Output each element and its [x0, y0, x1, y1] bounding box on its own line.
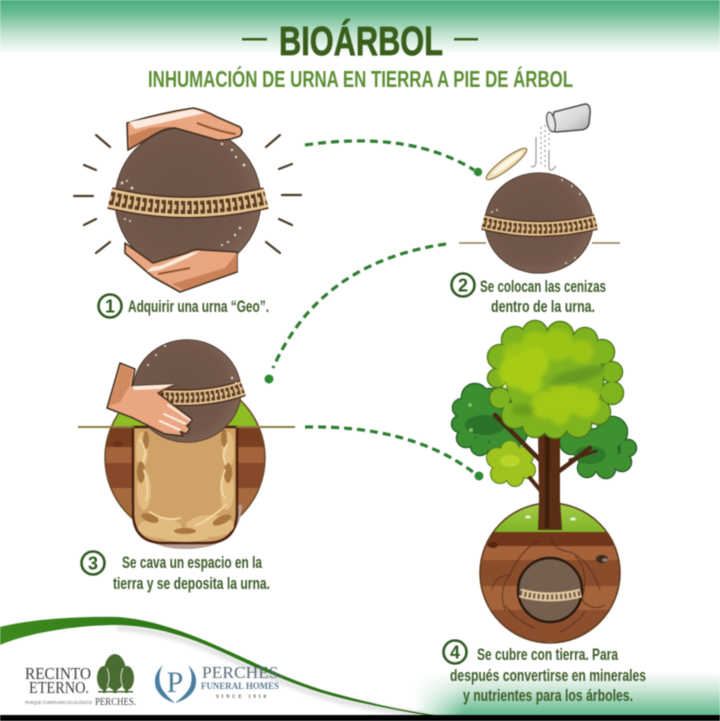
step 1 number badge: 1 — [105, 296, 115, 316]
icon: P emblem: P — [167, 666, 183, 699]
logo: Perches Funeral Homes: FUNERAL HOMES — [201, 681, 279, 691]
step 3 number badge — [82, 552, 104, 574]
step 3 caption: tierra y se deposita la urna. — [113, 574, 270, 593]
title: BIOÁRBOL — [279, 18, 443, 64]
icon: top hand — [127, 108, 242, 150]
logo: Perches Funeral Homes: PERCHES. — [202, 663, 283, 682]
icon: decorated urn band — [110, 198, 266, 208]
icon: hole shadow — [131, 505, 242, 549]
icon: hole with loose soil — [133, 427, 237, 543]
icon: main tree canopy — [488, 321, 623, 438]
icon: urn band — [150, 388, 243, 398]
step 2 caption: Se colocan las cenizas — [480, 277, 606, 296]
step 2 caption — [480, 277, 606, 316]
step 3 caption — [113, 553, 270, 593]
logo: Recinto Eterno: ETERNO. — [29, 678, 89, 697]
step 4 number badge: 4 — [450, 642, 460, 662]
arrow: step 2 to step 3 — [264, 244, 446, 384]
footer green swoosh — [0, 617, 435, 715]
step 4 number badge — [444, 640, 466, 664]
icon: hand on urn — [107, 363, 192, 436]
step 2 caption: dentro de la urna. — [491, 297, 595, 316]
icon: soil cross-section — [105, 401, 265, 517]
logo: Perches Funeral Homes — [155, 663, 283, 703]
step 2 number badge — [452, 274, 474, 296]
icon: ground line — [459, 242, 620, 244]
arrow: step 1 to step 2 — [305, 141, 482, 176]
step 1 caption: Adquirir una urna “Geo”. — [128, 297, 269, 316]
logo: Perches Funeral Homes: SINCE 1958 — [216, 695, 266, 700]
step 4 caption: Se cubre con tierra. Para — [477, 645, 618, 664]
icon: tree back-left foliage — [452, 384, 527, 456]
header gradient band — [0, 0, 720, 54]
panel: step 4 tree and buried urn — [452, 321, 636, 643]
step 3 caption: Se cava un espacio en la — [122, 553, 262, 572]
icon: pouring bottle — [545, 104, 590, 133]
icon: tree back-right foliage — [560, 417, 636, 478]
panel: step 1 urn held by hands — [74, 108, 301, 292]
logo: Recinto Eterno: PERCHES. — [95, 697, 136, 708]
icon: urn body — [115, 127, 261, 273]
icon: open urn — [485, 173, 593, 273]
step 1 number badge — [98, 294, 122, 318]
icon: urn speckles — [147, 345, 237, 384]
icon: small light foliage — [487, 441, 535, 486]
icon: bottom hand — [125, 243, 237, 292]
logo: Recinto Eterno: PARQUE FUNERARIO ECOLÓGICO — [25, 699, 92, 705]
step 4 caption — [450, 645, 646, 705]
bottom black bar — [0, 715, 720, 721]
icon: ground line — [78, 426, 295, 428]
step 2 number badge: 2 — [458, 276, 468, 296]
logo: Recinto Eterno: RECINTO — [25, 664, 91, 683]
step 4 caption: después convertirse en minerales — [450, 666, 646, 685]
step 4 caption: y nutrientes para los árboles. — [463, 686, 633, 705]
step 3 number badge: 3 — [88, 554, 98, 574]
icon: rays around urn — [74, 135, 301, 253]
icon: urn speckles — [491, 179, 581, 264]
icon: tree trunk and branches — [495, 415, 596, 530]
panel: step 2 urn with ashes — [459, 104, 620, 273]
footer gradient band — [415, 672, 720, 715]
arrow: step 3 to step 4 — [305, 427, 484, 480]
icon: logo trees — [97, 654, 134, 693]
logo: Recinto Eterno — [25, 654, 136, 708]
icon: soil circle with buried urn — [480, 503, 620, 643]
icon: falling ashes — [531, 125, 556, 170]
icon: urn speckles — [121, 143, 245, 246]
icon: urn being lowered — [133, 340, 241, 442]
icon: urn band — [483, 222, 596, 229]
panel: step 3 urn in the hole — [78, 340, 295, 549]
icon: urn lid — [483, 145, 530, 183]
